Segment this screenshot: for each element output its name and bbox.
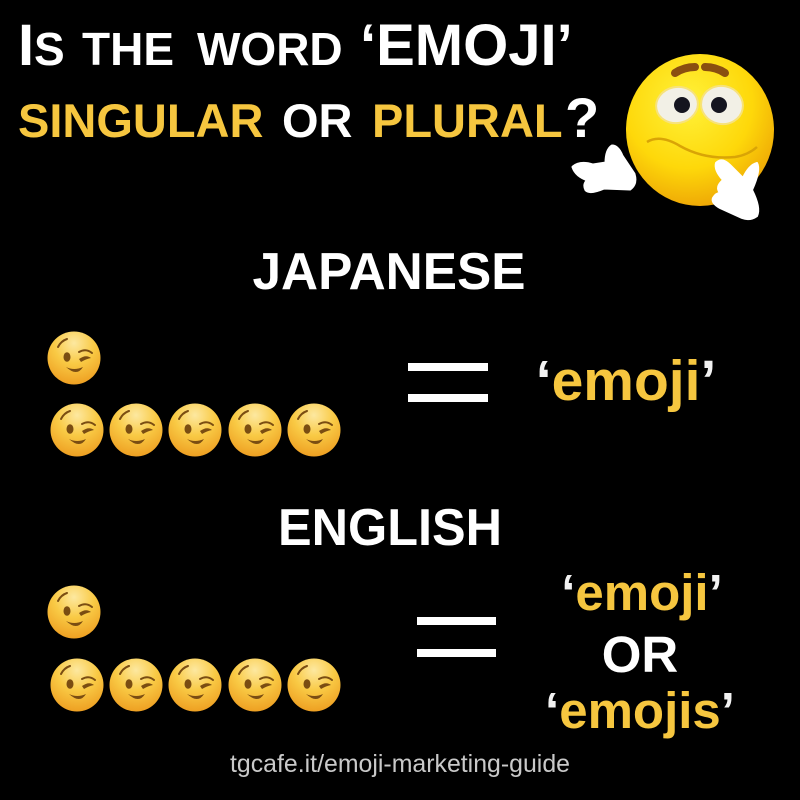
label: emoji or emojis — [545, 564, 735, 739]
icon: left hand — [573, 146, 635, 192]
title line 2: OR — [282, 94, 352, 147]
heading: Japanese: JAPANESE — [252, 243, 526, 301]
equals sign — [408, 363, 488, 402]
icon: single wink emoji — [48, 332, 100, 384]
icon: thinking emoji with hands — [573, 54, 774, 219]
title line 1: I — [18, 13, 34, 78]
icons: row of five wink emoji — [50, 404, 340, 456]
title line 1: THE — [82, 23, 174, 75]
label: emoji or emojis: ‘emojis’ — [545, 682, 735, 739]
title line 2: SINGULAR — [18, 94, 263, 147]
equals sign — [417, 617, 496, 657]
title line 1: ‘EMOJI’ — [360, 13, 573, 78]
source url: tgcafe.it/emoji-marketing-guide — [230, 750, 570, 778]
label: emoji or emojis: ‘emoji’ — [561, 564, 723, 621]
icon: single wink emoji — [48, 586, 100, 638]
icons: row of five wink emoji — [50, 658, 340, 712]
label: emoji or emojis: OR — [602, 626, 678, 683]
title line 1: WORD — [197, 23, 343, 75]
icon: right hand — [713, 160, 758, 219]
heading: English: ENGLISH — [278, 499, 502, 557]
title line 1: S — [34, 23, 65, 75]
icon: emoji face — [626, 54, 774, 206]
title line 2: PLURAL — [372, 94, 563, 147]
title line 2: ? — [565, 86, 599, 149]
label: emoji: ‘emoji’ — [536, 349, 716, 413]
